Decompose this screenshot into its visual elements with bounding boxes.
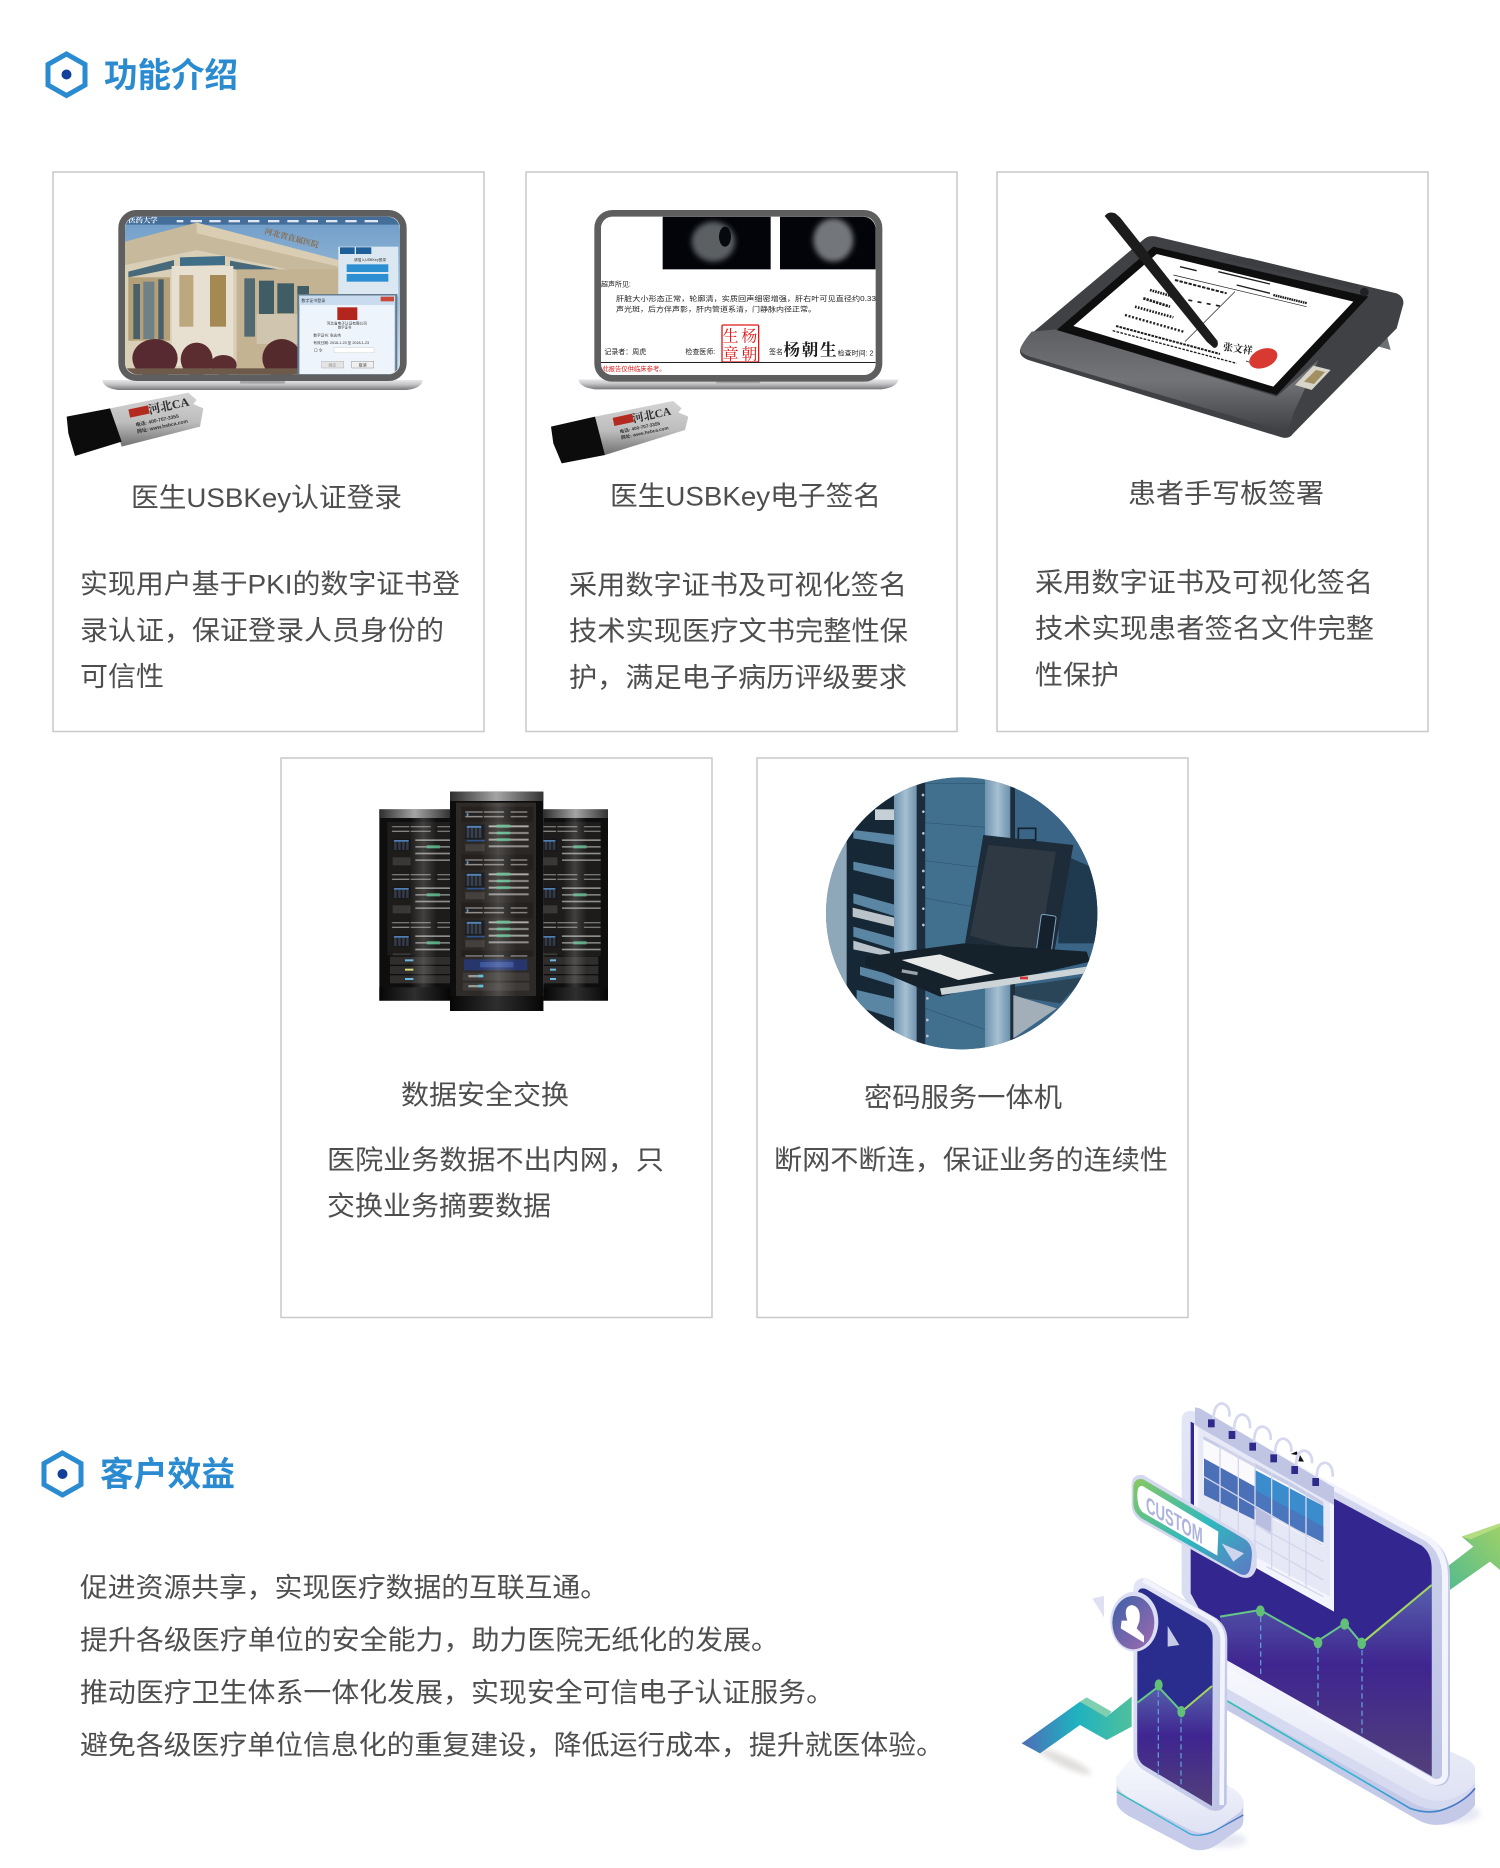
- image: laptop with signed report: 检查时间: 2: [838, 348, 873, 357]
- card body text: 护，满足电子病历评级要求: [569, 663, 907, 693]
- image: laptop with signed report: 声光斑，后方伴声影，肝内管道系清，门静脉内径正常。: [616, 305, 816, 314]
- card body text: 技术实现患者签名文件完整: [1035, 614, 1374, 644]
- image: laptop with signed report: 杨朝生: [783, 339, 837, 359]
- panel: 医生USBKey认证登录: [53, 172, 484, 732]
- illustration: monitor, calendar and phone: [1022, 1403, 1500, 1850]
- card body text: 采用数字证书及可视化签名: [569, 570, 907, 600]
- card body text: 性保护: [1035, 660, 1119, 690]
- benefits text block: 促进资源共享，实现医疗数据的互联互通。: [80, 1573, 608, 1603]
- phone base: [1117, 1757, 1247, 1850]
- card body text: 录认证，保证登录人员身份的: [80, 616, 444, 646]
- benefits text block: [80, 1573, 944, 1760]
- panel: 医生USBKey电子签名: [526, 172, 957, 732]
- icon: user avatar badge: [1092, 1592, 1179, 1652]
- arrow: rising right: [1445, 1523, 1500, 1593]
- image: USB key: [551, 401, 688, 463]
- image: USB key: [67, 393, 203, 456]
- image: laptop with signed report: 朝: [741, 345, 757, 363]
- phone: [1133, 1578, 1227, 1811]
- section heading: 客户效益: [44, 1453, 235, 1495]
- section heading: 功能介绍: [48, 54, 238, 96]
- image: server racks: [379, 792, 608, 1011]
- custom label pill: [1132, 1475, 1257, 1578]
- image: USB key: 电话: 400-707-3355: [135, 413, 180, 429]
- card body text: 断网不断连，保证业务的连续性: [774, 1146, 1168, 1176]
- panel: 数据安全交换: [281, 758, 712, 1318]
- image: laptop with signed report: 生: [723, 327, 739, 345]
- card body text: [327, 1146, 664, 1222]
- image: laptop with signed report: 签名: [769, 347, 783, 356]
- image: USB key: 网址: www.hebca.com: [136, 418, 189, 435]
- image: laptop with hospital login: 确定: [328, 361, 336, 367]
- card title: 医生USBKey认证登录: [131, 483, 402, 513]
- image: laptop with signed report: 肝脏大小形态正常，轮廓清，实质回声细密增强，肝右叶可见直径约0.33: [616, 294, 876, 303]
- panel: 密码服务一体机: [757, 758, 1188, 1318]
- heading text: 功能介绍: [104, 57, 238, 95]
- image: laptop with hospital login: 河北省直属医院: [263, 226, 320, 250]
- calendar: [1194, 1403, 1334, 1612]
- image: laptop with hospital login: 请插入USBKey登录: [354, 257, 386, 262]
- image: laptop with hospital login: 河北省电子认证有限公司: [327, 321, 367, 326]
- image: laptop with hospital login: 数字证书: [338, 325, 352, 330]
- image: USB key: 河北CA: [147, 395, 191, 417]
- image: laptop with hospital login: 有效日期: 2018-1-23 至 2018-1-23: [313, 340, 369, 345]
- card title: 患者手写板签署: [1128, 479, 1324, 509]
- image: laptop with signed report: 章: [723, 344, 739, 363]
- card body text: [569, 570, 908, 693]
- card body text: [1035, 568, 1374, 690]
- image: laptop with signed report: 此报告仅供临床参考。: [602, 364, 666, 373]
- card body text: [80, 570, 460, 692]
- panel: 患者手写板签署: [997, 172, 1428, 732]
- image: laptop with signed report: 记录者：周虎: [604, 347, 646, 356]
- card title: 数据安全交换: [401, 1080, 569, 1110]
- image: laptop with hospital login: 取消: [359, 361, 367, 367]
- card title: 医生USBKey电子签名: [610, 482, 881, 512]
- heading text: 客户效益: [100, 1456, 235, 1494]
- icon: hexagon: [48, 54, 85, 96]
- card title: 密码服务一体机: [864, 1083, 1062, 1113]
- image: laptop with signed report: 杨: [741, 327, 757, 345]
- image: laptop with signed report: 超声所见:: [601, 280, 631, 289]
- card body text: 可信性: [80, 662, 164, 692]
- image: laptop with hospital login: [102, 213, 423, 390]
- image: signature tablet with pen: 张文祥: [1222, 340, 1254, 357]
- image: USB key: 电话: 400-707-3355: [619, 420, 661, 435]
- image: USB key: 河北CA: [631, 405, 673, 426]
- card body text: 采用数字证书及可视化签名: [1035, 568, 1373, 598]
- image: rack-mounted KVM console: [825, 777, 1098, 1050]
- image: laptop with hospital login: 数字证书登录: [301, 297, 325, 303]
- card body text: 技术实现医疗文书完整性保: [569, 616, 908, 646]
- arrow: rising left: [1022, 1697, 1132, 1778]
- image: laptop with hospital login: 医药大学: [128, 216, 158, 225]
- image: laptop with hospital login: 数字证书: 张志伟: [313, 333, 341, 338]
- card body text: 医院业务数据不出内网，只: [327, 1146, 664, 1176]
- card body text: 交换业务摘要数据: [327, 1192, 551, 1222]
- icon: hexagon: [44, 1453, 81, 1495]
- image: USB key: 网址: www.hebca.com: [620, 424, 669, 441]
- image: laptop with signed report: 检查医师:: [685, 347, 715, 356]
- benefits text block: 避免各级医疗单位信息化的重复建设，降低运行成本，提升就医体验。: [80, 1730, 944, 1760]
- benefits text block: 提升各级医疗单位的安全能力，助力医院无纸化的发展。: [80, 1626, 779, 1656]
- image: laptop with hospital login: 口 令:: [314, 347, 323, 352]
- monitor frame and screen: [1182, 1411, 1450, 1786]
- monitor base: [1227, 1667, 1480, 1825]
- benefits text block: 推动医疗卫生体系一体化发展，实现安全可信电子认证服务。: [80, 1678, 834, 1708]
- image: signature tablet with pen: [1020, 212, 1403, 438]
- image: laptop with signed report: [578, 213, 898, 389]
- card body text: 实现用户基于PKI的数字证书登: [80, 570, 460, 600]
- custom label pill: CUSTOM: [1146, 1493, 1203, 1550]
